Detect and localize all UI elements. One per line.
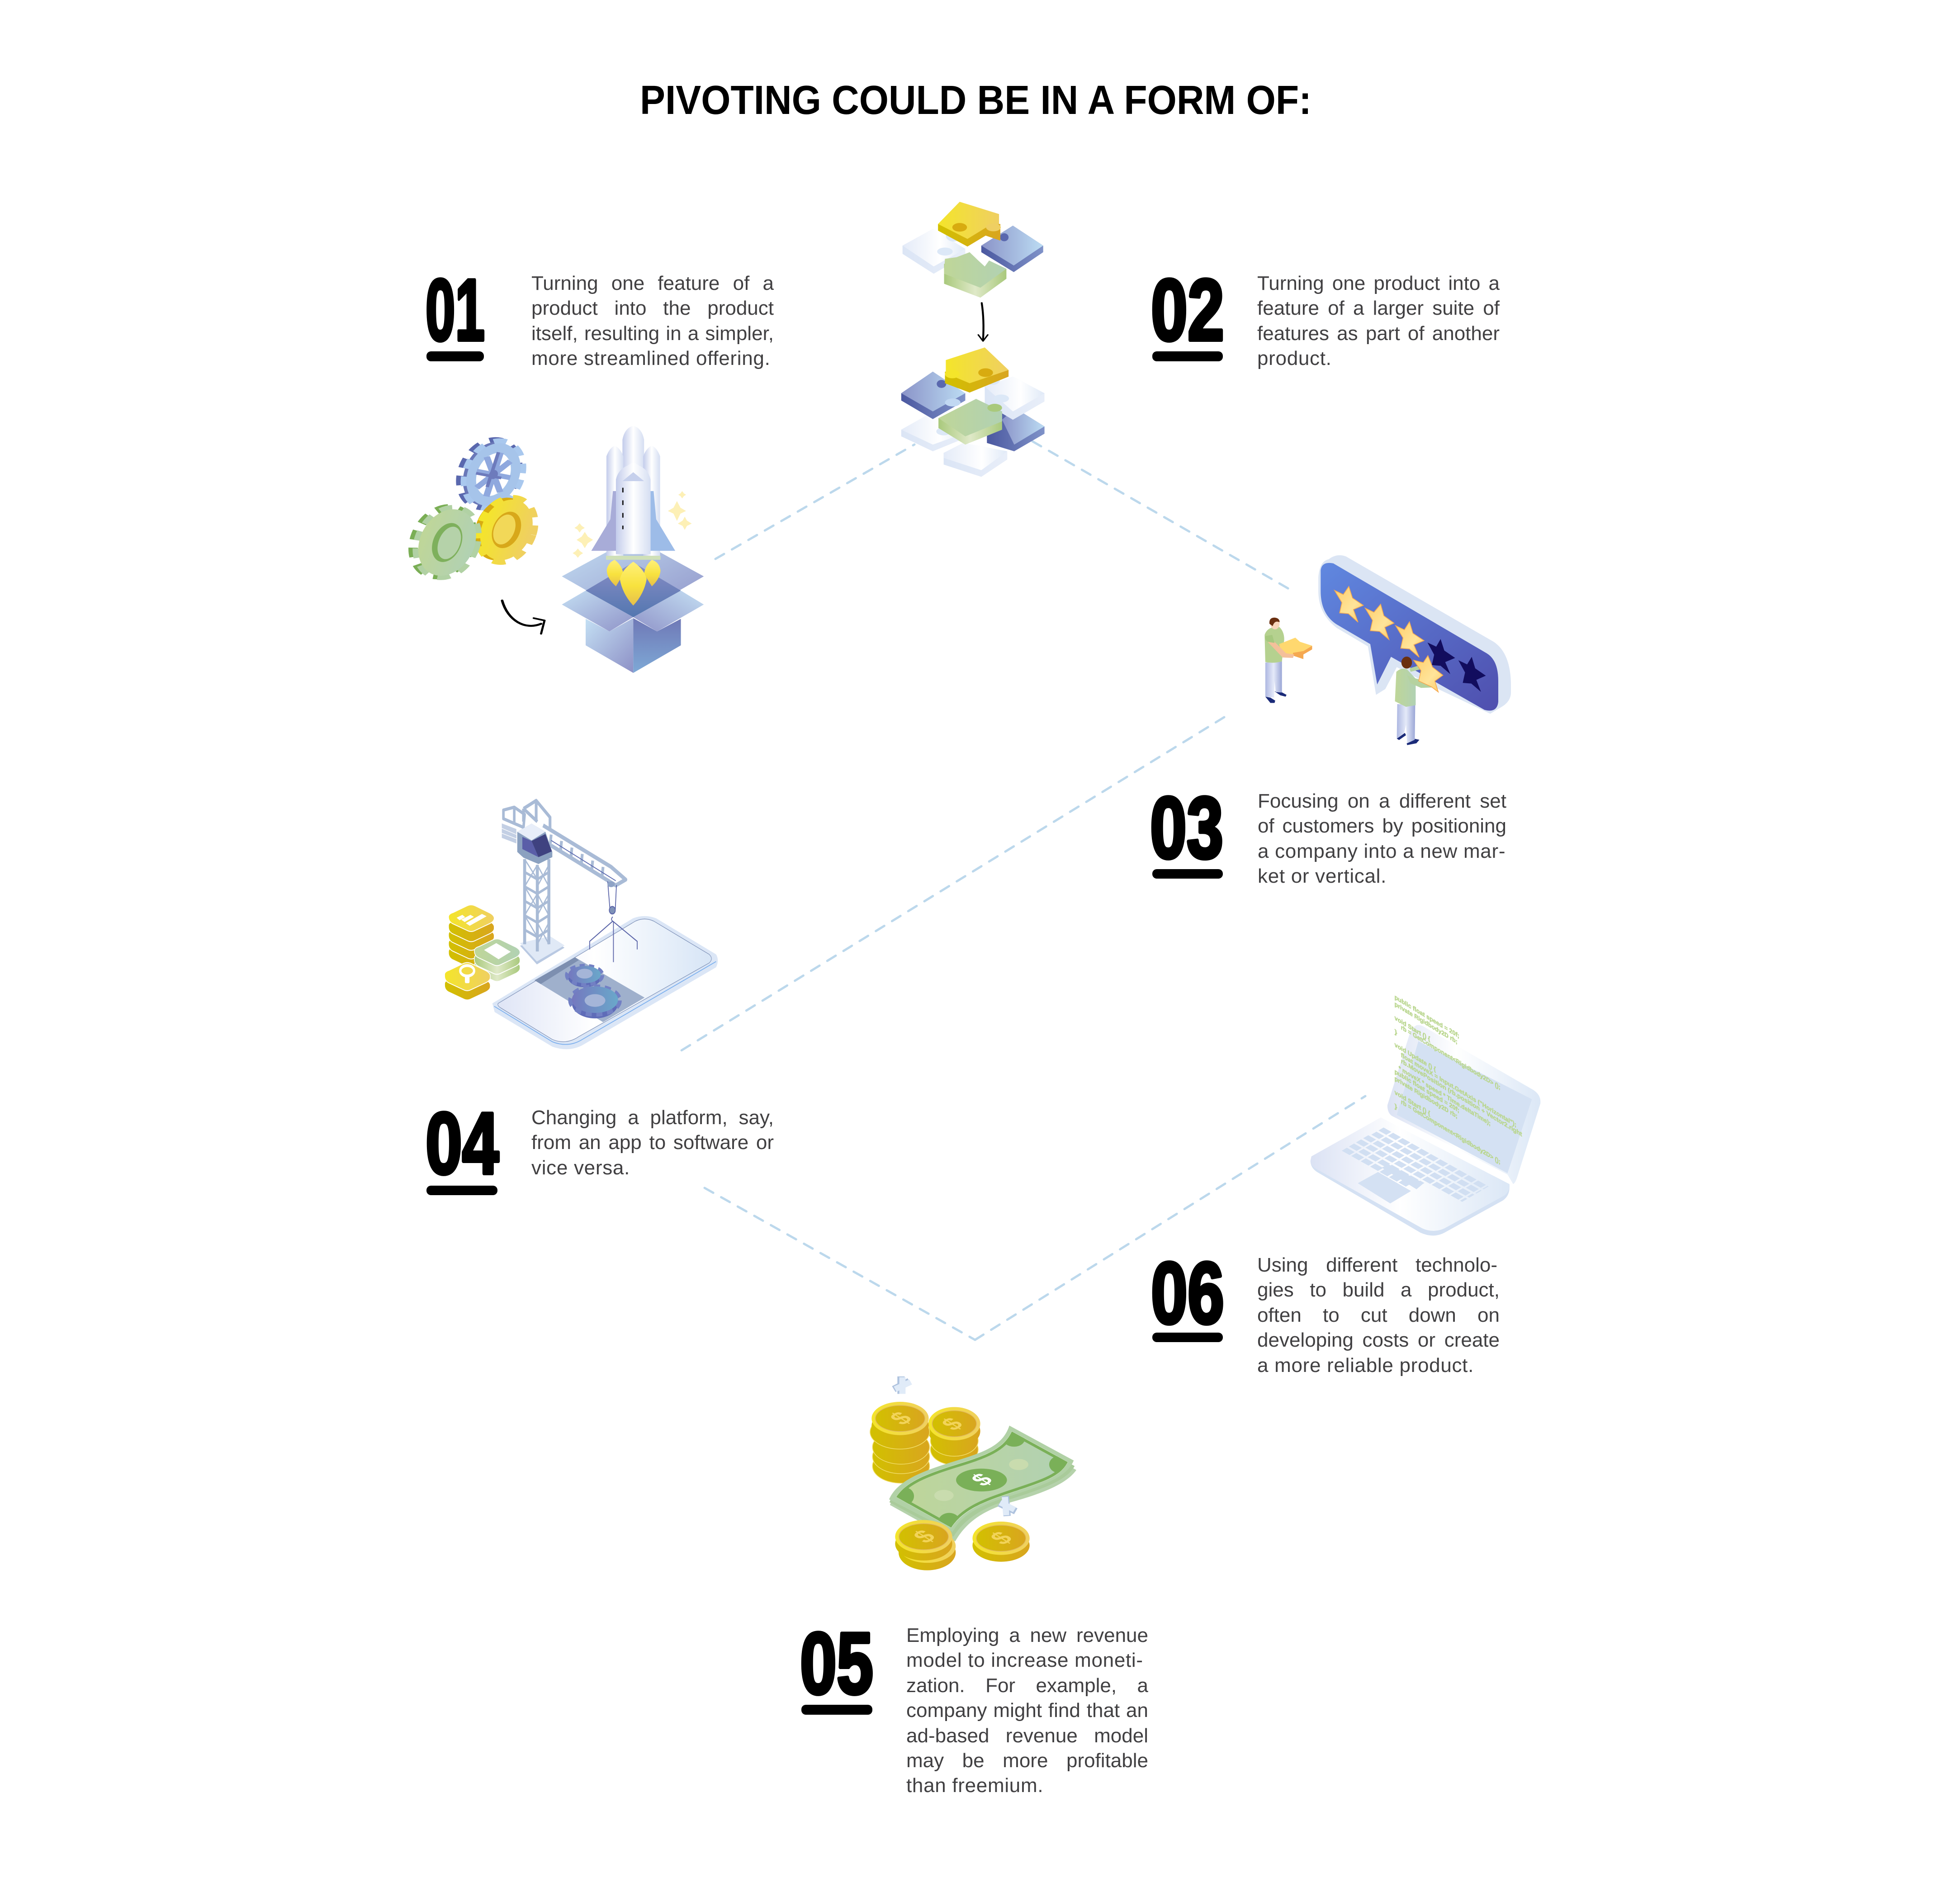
text block 03 [1258,789,1506,889]
dashed connector: platform to money [705,1188,975,1340]
text block 05: company might find that an [906,1699,1148,1721]
text block 06: often to cut down on [1257,1304,1500,1326]
number 01 [426,261,485,361]
icon: green gear [404,503,486,581]
code text: float moveX = Input.GetAxis ("Horizontal"); [1401,1052,1516,1129]
icon: plus top [894,1376,911,1394]
text block 01: itself, resulting in a simpler, [531,322,774,345]
dashed connector: rocket to puzzle [715,445,914,559]
code text: } [1395,1103,1397,1111]
number 02: 02 [1151,261,1224,359]
arrow: gears to rocket [502,601,544,634]
title: PIVOTING COULD BE IN A FORM OF: [640,78,1311,123]
icon: yellow search stack [445,963,490,1000]
icon: laptop base [1311,1117,1510,1235]
code text: void Start () { [1395,1014,1430,1043]
number 05: 05 [800,1614,873,1712]
icon: keyboard [1345,1128,1486,1209]
text block 01: product into the product [531,297,774,319]
dashed connector: money to laptop [975,1096,1365,1340]
code text: * moveX * speed * Time.deltaTime); [1399,1064,1491,1127]
text block 03: Focusing on a different set [1258,790,1506,812]
icon: crane jib [503,800,625,885]
number 04: 04 [426,1094,499,1192]
icon: plus lower [999,1496,1016,1516]
person: holding star [1264,618,1312,703]
icon: blue gear [453,436,530,512]
code text: private Rigidbody2D rb; [1395,1075,1458,1120]
person: placing star [1395,656,1443,745]
text block 05: model to increase moneti- [906,1649,1143,1671]
code text: public float speed = 20f; [1395,993,1459,1040]
icon: yellow gear [466,493,542,566]
icon: banknote stack: $ [965,1469,998,1490]
text block 06: a more reliable product. [1257,1354,1474,1376]
number 03: 03 [1150,779,1223,876]
text block 05 [906,1623,1148,1798]
icon: gears inside phone [567,966,620,1018]
code text: rb = GetComponent<Rigidbody2D> (); [1401,1024,1501,1091]
text block 06: gies to build a product, [1257,1279,1500,1301]
icon: coin stack right [928,1407,980,1465]
text block 06 [1257,1253,1500,1378]
icon: spacebar [1382,1164,1424,1189]
icon: empty stars [1427,639,1486,692]
illustration: puzzle pieces before and after [901,202,1045,477]
icon: yellow chart stack [449,905,494,968]
illustration: coins and banknotes [870,1376,1076,1570]
text block 01: more streamlined offering. [531,347,771,369]
icon: coin stack left: $ [884,1408,918,1429]
icon: crane hook and claw [590,881,637,962]
text block 06: Using different technolo- [1257,1254,1497,1276]
text block 05: may be more profitable [906,1750,1148,1772]
text block 03: ket or vertical. [1258,865,1387,887]
dashed connector: rating to crane [675,717,1224,1055]
icon: phone [492,916,718,1049]
icon: bottom puzzle [901,347,1045,477]
icon: open box [562,538,704,673]
code text [1395,993,1522,1166]
icon: rocket [591,426,675,605]
text block 04: from an app to software or [531,1131,774,1154]
text block 02: product. [1257,347,1332,369]
icon: counterweight [502,823,516,844]
text block 02: Turning one product into a [1257,272,1500,294]
icon: green mail stack [474,939,520,981]
text block 03: a company into a new mar- [1258,840,1506,862]
code text: rb = GetComponent<Rigidbody2D> (); [1401,1098,1501,1166]
text block 01 [531,271,774,371]
icon: coin stack bottom left: $ [908,1526,942,1547]
text block 02: features as part of another [1257,322,1500,345]
text block 04: Changing a platform, say, [531,1107,774,1129]
illustration: gears, rocket and box [404,426,704,673]
illustration: crane, app stacks and phone [445,800,718,1049]
icon: single coin: $ [985,1528,1018,1549]
icon: coin stack bottom left [895,1520,956,1570]
icon: crane cab [517,823,552,864]
icon: coin stack left [870,1402,930,1483]
text block 06: developing costs or create [1257,1329,1500,1351]
icon: crane base [520,936,564,965]
number 06: 06 [1151,1244,1224,1342]
text block 04 [531,1105,774,1180]
text block 05: than freemium. [906,1774,1043,1797]
code text: public float speed = 20f; [1395,1068,1459,1114]
icon: top puzzle [903,202,1043,298]
icon: crane tower [525,859,549,951]
illustration: rating bubble with two people [1264,555,1511,745]
code text: void Update () { [1395,1041,1436,1073]
arrow: puzzle transition [978,303,988,341]
dashed connector: puzzle to rating bubble [1032,441,1293,591]
code text: void Start () { [1395,1089,1430,1117]
illustration: laptop with code [1311,993,1540,1235]
text block 02 [1257,271,1500,371]
icon: sparkles [573,491,691,558]
code text: rb.MovePosition (rb.position + Vector2.right [1401,1058,1522,1138]
text block 05: zation. For example, a [906,1674,1148,1697]
icon: speech bubble [1318,555,1511,714]
icon: banknote stack [889,1426,1076,1542]
icon: single coin [972,1522,1030,1562]
text block 03: of customers by positioning [1258,815,1506,837]
text block 05: ad-based revenue model [906,1725,1148,1747]
number 01: 01 [426,261,485,359]
icon: gold stars [1335,586,1424,657]
code text: } [1395,1028,1397,1036]
icon: laptop screen [1387,1025,1540,1184]
text block 04: vice versa. [531,1157,630,1179]
text block 05: Employing a new revenue [906,1624,1148,1646]
text block 01: Turning one feature of a [531,272,774,294]
text block 02: feature of a larger suite of [1257,297,1500,319]
icon: trackpad [1359,1172,1411,1203]
icon: coin stack right: $ [936,1414,969,1434]
code text: private Rigidbody2D rb; [1395,1001,1458,1045]
